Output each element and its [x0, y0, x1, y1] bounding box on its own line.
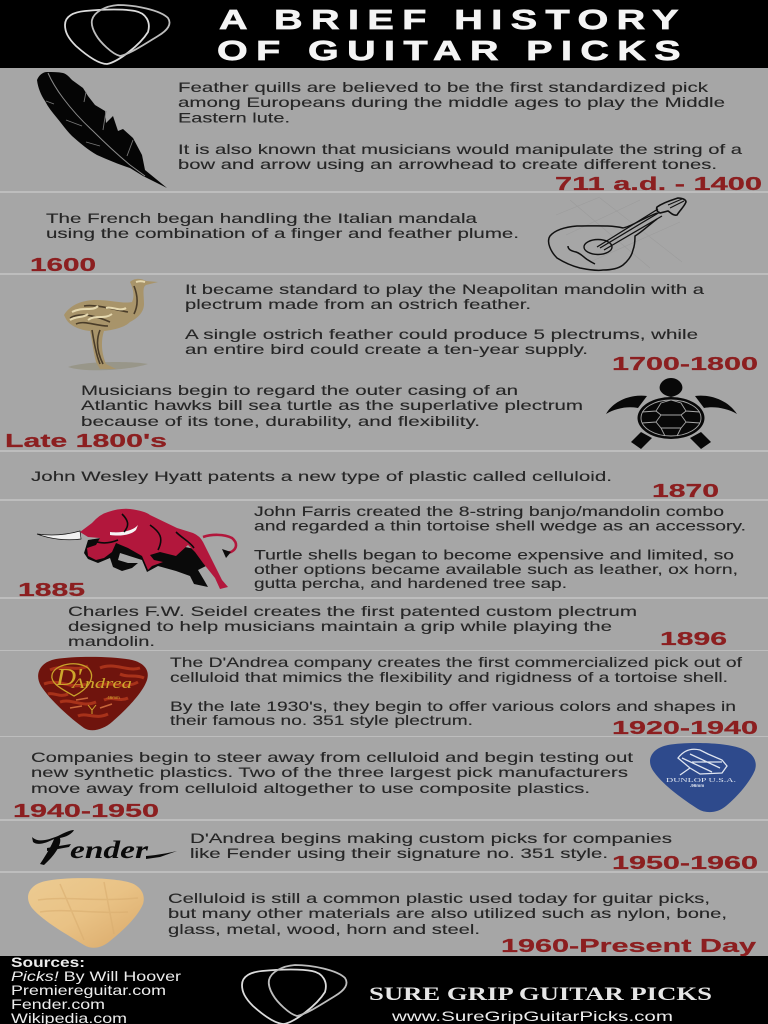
icon: D'Andrea tortoise pick: .46mm: [106, 695, 120, 700]
date: 1885: 1885: [18, 579, 85, 600]
icon: sea turtle: [606, 378, 737, 449]
title: [217, 4, 689, 66]
date: 1700-1800: 1700-1800: [612, 353, 758, 374]
text: ostrich feather: [185, 281, 704, 357]
text: Seidel custom plectrum: [68, 603, 637, 649]
panel: feather quills: [0, 68, 768, 194]
icon: feather: [37, 72, 167, 188]
text: feather quills: among Europeans during the middle ages to play the Middle: [178, 94, 725, 110]
text: sea turtle: Musicians begin to regard the outer casing of an: [81, 382, 518, 398]
icon: wooden pick: [28, 878, 144, 948]
text: D'Andrea celluloid pick: celluloid that mimics the flexibility and rigidness of a tortoise shell.: [170, 669, 728, 685]
date: 711 a.d. - 1400: 711 a.d. - 1400: [555, 173, 762, 194]
panel: Seidel custom plectrum: [0, 599, 768, 650]
icon: Dunlop blue pick: [650, 743, 756, 812]
text: sea turtle: because of its tone, durability, and flexibility.: [81, 413, 480, 429]
text: D'Andrea celluloid pick: The D'Andrea company creates the first commercialized pick out of: [170, 654, 742, 670]
icon: Fender logo: ender: [70, 837, 148, 864]
text: Seidel custom plectrum: mandolin.: [68, 633, 155, 649]
text: Fender custom picks: like Fender using their signature no. 351 style.: [190, 845, 608, 861]
text: banjo mandolin combo: John Farris created the 8-string banjo/mandolin combo: [254, 503, 724, 519]
text: feather quills: Eastern lute.: [178, 110, 290, 126]
text: feather quills: bow and arrow using an arrowhead to create different tones.: [178, 156, 717, 172]
text: banjo mandolin combo: gutta percha, and hardened tree sap.: [254, 575, 567, 591]
date: 1920-1940: 1920-1940: [612, 717, 758, 738]
text: synthetic plastics: new synthetic plastics. Two of the three largest pick manufacturers: [31, 764, 628, 780]
date: 1940-1950: 1940-1950: [13, 800, 159, 821]
icon: footer picks logo: [242, 965, 347, 1024]
icon: ostrich: [64, 279, 158, 370]
sources list: [11, 954, 181, 1024]
panel: ostrich feather: [0, 275, 768, 374]
panel: banjo mandolin combo: [0, 501, 768, 600]
website: www.SureGripGuitarPicks.com: [391, 1008, 673, 1024]
text: sea turtle: [81, 382, 583, 429]
icon: D'Andrea tortoise pick: Andrea: [71, 676, 132, 692]
text: French mandala: The French began handling the Italian mandala: [46, 210, 477, 226]
brand name: SURE GRIP GUITAR PICKS: [369, 985, 712, 1005]
panel: celluloid patent: [0, 452, 768, 501]
text: synthetic plastics: Companies begin to steer away from celluloid and begin testing out: [31, 749, 633, 765]
text: D'Andrea celluloid pick: [170, 654, 742, 728]
text: sea turtle: Atlantic hawks bill sea turtle as the superlative plectrum: [81, 397, 583, 413]
title: A BRIEF HISTORY: [219, 4, 687, 35]
panel: sea turtle: [0, 375, 768, 451]
text: D'Andrea celluloid pick: their famous no. 351 style plectrum.: [170, 712, 473, 728]
date: 1960-Present Day: 1960-Present Day: [501, 935, 757, 956]
sources list: Premiereguitar.com: [11, 982, 166, 998]
sources list: Fender.com: [11, 996, 105, 1012]
title: OF GUITAR PICKS: [217, 35, 689, 66]
text: feather quills: It is also known that musicians would manipulate the string of a: [178, 141, 742, 157]
text: ostrich feather: plectrum made from an ostrich feather.: [185, 296, 531, 312]
text: feather quills: Feather quills are believed to be the first standardized pick: [178, 79, 709, 95]
text: synthetic plastics: move away from celluloid altogether to use composite plastics.: [31, 780, 590, 796]
footer: [0, 954, 768, 1024]
icon: overlapping picks logo: [65, 5, 170, 64]
text: Fender custom picks: D'Andrea begins making custom picks for companies: [190, 830, 672, 846]
text: modern materials: glass, metal, wood, horn and steel.: [168, 921, 480, 937]
date: Late 1800's: Late 1800's: [5, 430, 167, 451]
sources list: Sources:: [11, 954, 85, 970]
text: banjo mandolin combo: [254, 503, 746, 591]
icon: mandolin: [549, 197, 686, 270]
panel: Fender custom picks: [0, 821, 768, 873]
panel: French mandala: [0, 193, 768, 275]
text: banjo mandolin combo: Turtle shells began to become expensive and limited, so: [254, 546, 734, 562]
text: Seidel custom plectrum: Charles F.W. Seidel creates the first patented custom plectrum: [68, 603, 637, 619]
text: French mandala: [46, 210, 519, 241]
date: 1950-1960: 1950-1960: [612, 852, 758, 873]
text: modern materials: but many other materials are also utilized such as nylon, bone,: [168, 905, 727, 921]
text: ostrich feather: It became standard to play the Neapolitan mandolin with a: [185, 281, 704, 297]
text: celluloid patent: John Wesley Hyatt patents a new type of plastic called celluloid.: [31, 468, 612, 484]
text: Seidel custom plectrum: designed to help musicians maintain a grip while playing the: [68, 618, 612, 634]
text: Fender custom picks: [190, 830, 672, 861]
icon: charging bull: [37, 509, 236, 589]
icon: D'Andrea tortoise pick: [38, 657, 148, 730]
text: feather quills: [178, 79, 742, 172]
date: 1896: 1896: [660, 628, 727, 649]
date: 1870: 1870: [652, 480, 719, 501]
text: modern materials: Celluloid is still a common plastic used today for guitar picks,: [168, 890, 710, 906]
icon: Dunlop blue pick: .96mm: [690, 783, 704, 788]
text: D'Andrea celluloid pick: By the late 1930's, they begin to offer various colors and shapes in: [170, 698, 736, 714]
header banner: [0, 0, 768, 68]
text: French mandala: using the combination of a finger and feather plume.: [46, 225, 519, 241]
text: modern materials: [168, 890, 727, 937]
sources list: Picks! By Will Hoover: [11, 968, 181, 984]
panel: modern materials: [0, 873, 768, 956]
icon: Fender logo: [32, 830, 177, 865]
text: banjo mandolin combo: other options became available such as leather, ox horn,: [254, 561, 738, 577]
date: 1600: 1600: [30, 254, 96, 275]
panel: D'Andrea celluloid pick: [0, 651, 768, 738]
panel: synthetic plastics: [0, 737, 768, 821]
text: banjo mandolin combo: and regarded a thin tortoise shell wedge as an accessory.: [254, 518, 746, 534]
text: synthetic plastics: [31, 749, 633, 796]
text: ostrich feather: an entire bird could create a ten-year supply.: [185, 341, 588, 357]
icon: D'Andrea tortoise pick: D': [55, 665, 83, 691]
icon: Dunlop blue pick: DUNLOP U.S.A.: [666, 778, 737, 784]
text: ostrich feather: A single ostrich feather could produce 5 plectrums, while: [185, 326, 698, 342]
